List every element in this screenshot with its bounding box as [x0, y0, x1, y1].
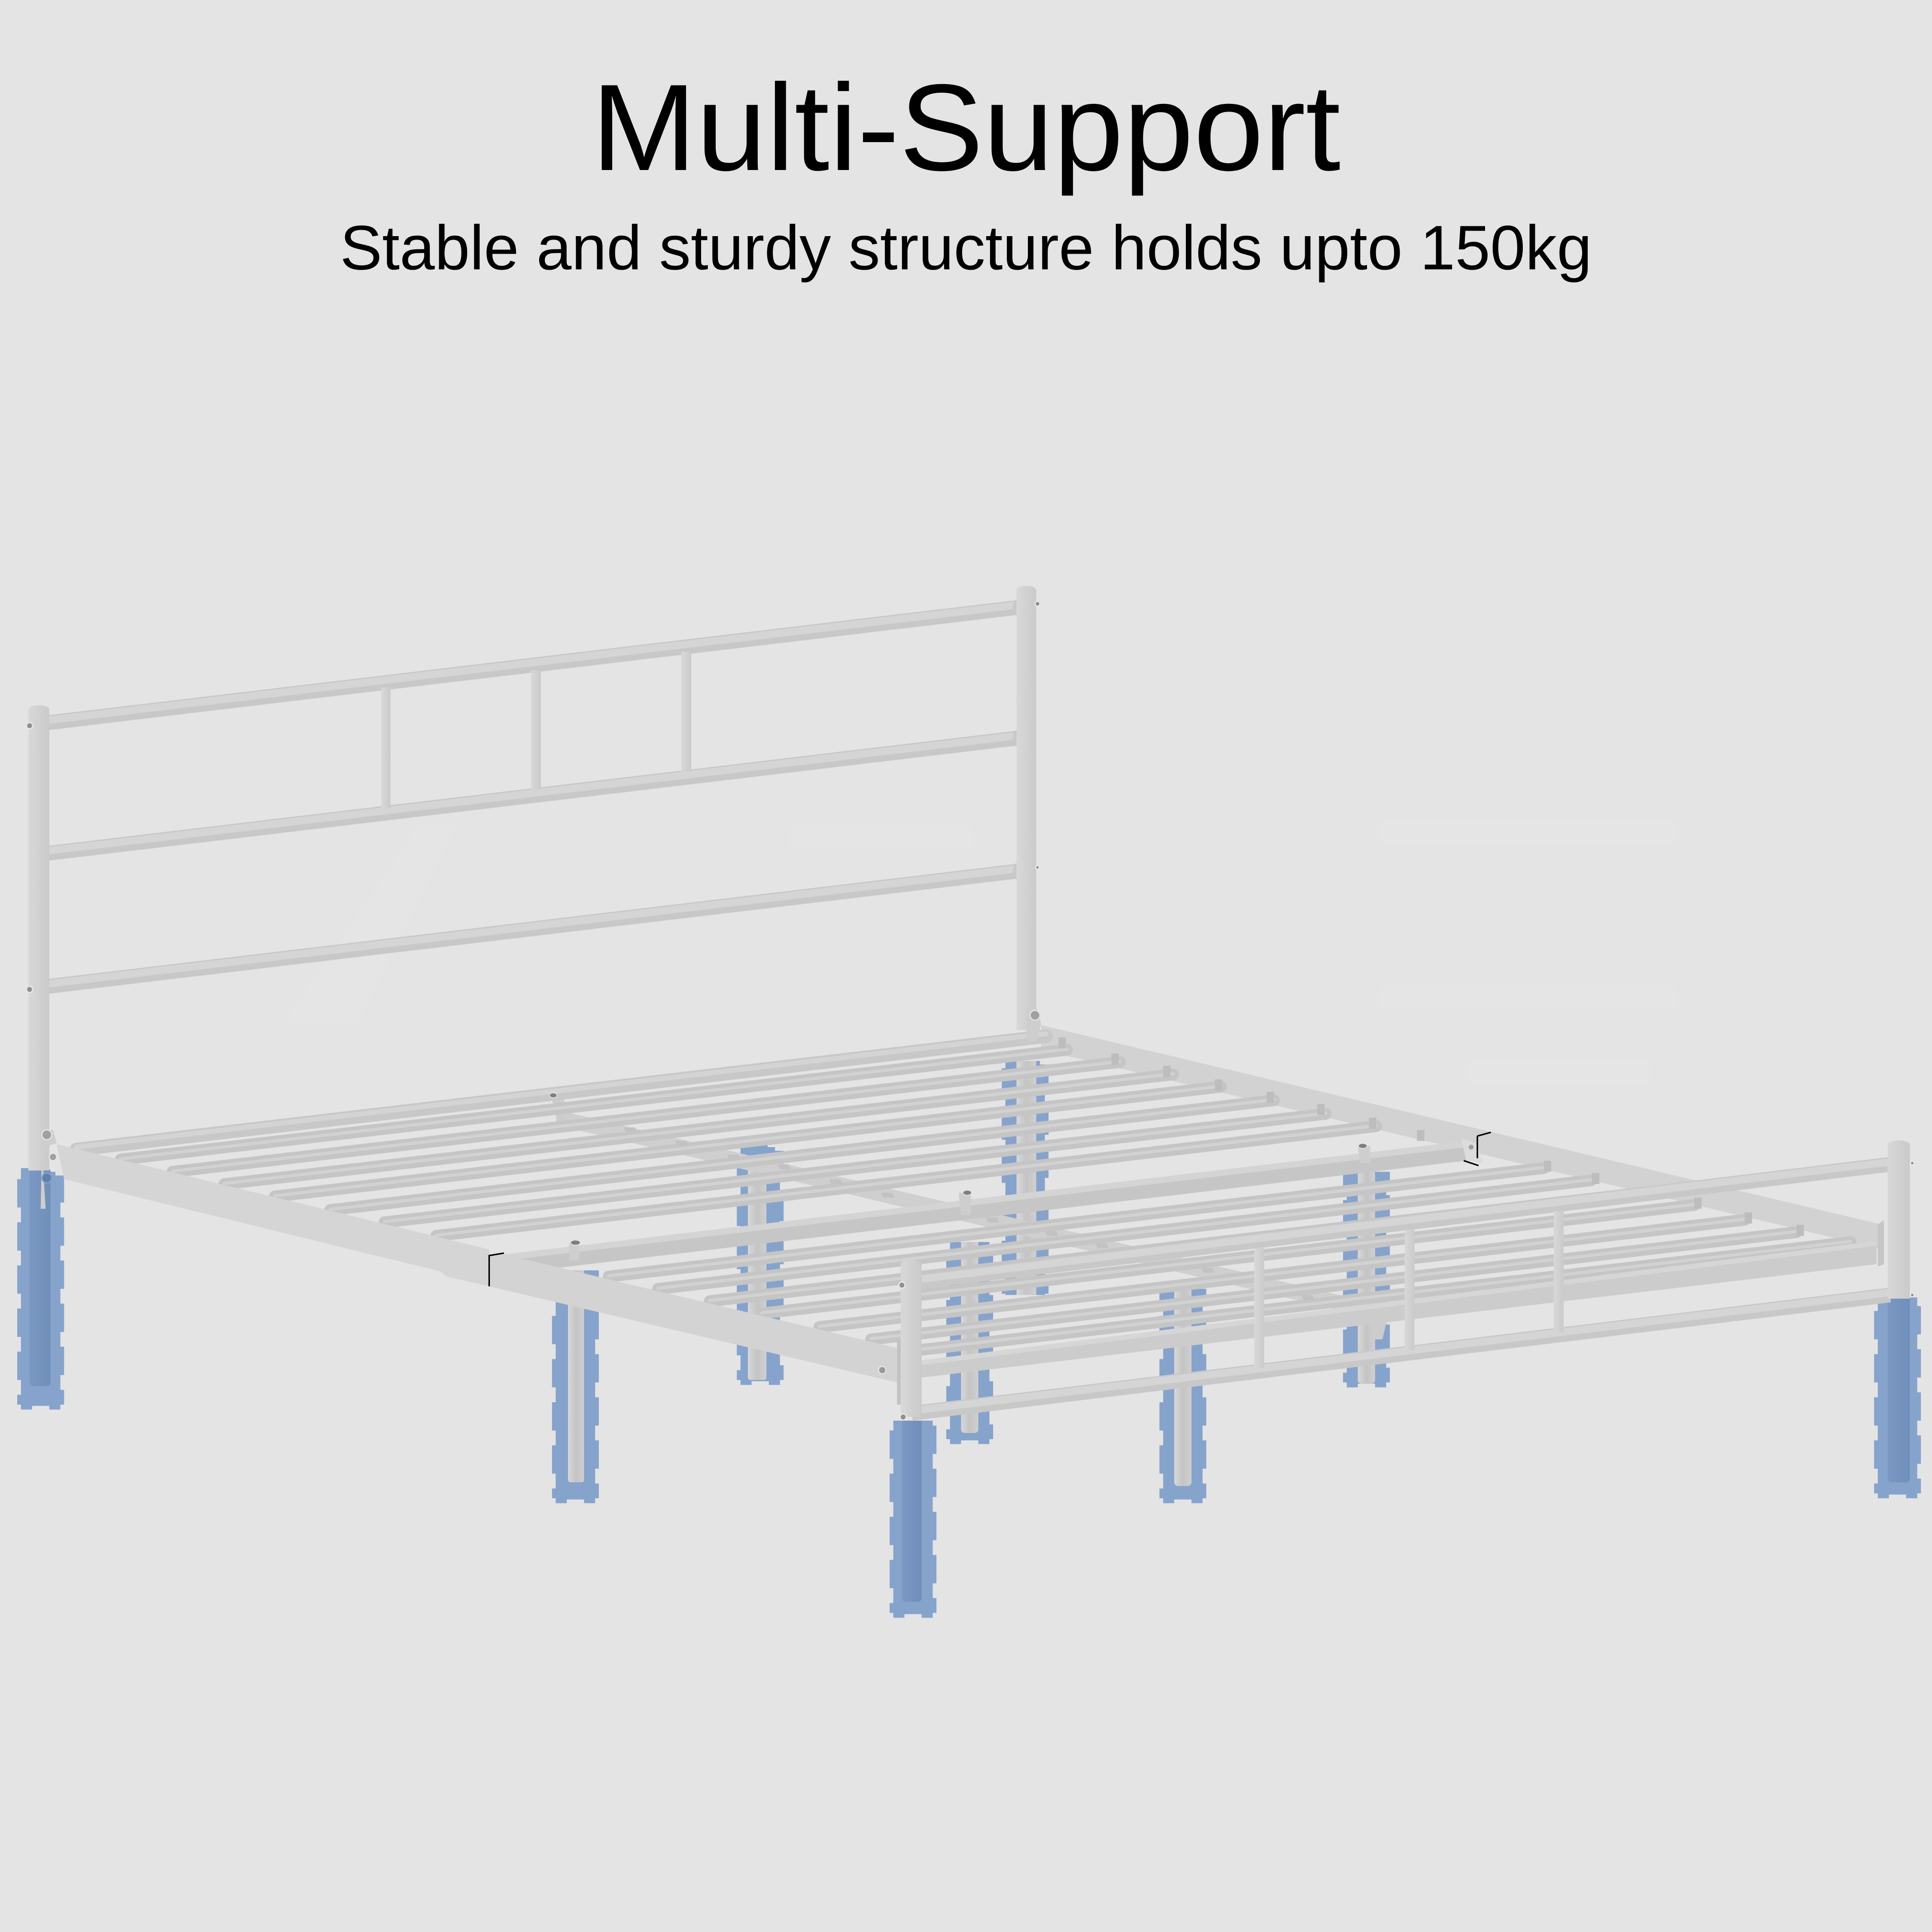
- left rail extension: [489, 1255, 897, 1382]
- leg highlight: head left: [17, 1168, 64, 1410]
- headboard vertical bars: [381, 652, 691, 808]
- leg highlight: side centre rear: [1343, 1172, 1390, 1388]
- leg highlight: centre foot: [1159, 1289, 1206, 1504]
- right head bracket: [1027, 1007, 1041, 1041]
- leg highlight: centre rear: [737, 1143, 784, 1385]
- footboard rails: [912, 1162, 1890, 1413]
- footboard screws: [899, 1161, 1914, 1420]
- leg highlight: foot left: [890, 1421, 937, 1618]
- centre cross beam: [505, 1093, 1466, 1274]
- footboard vertical bars: [1255, 1211, 1564, 1368]
- highlighted support legs: [17, 1035, 1921, 1618]
- footboard beam: [878, 1220, 1884, 1405]
- headboard: [27, 586, 1040, 1170]
- leg highlight: head right: [1002, 1061, 1048, 1295]
- headboard right post: [1017, 586, 1036, 1030]
- leg highlight: centre middle: [946, 1242, 993, 1444]
- head corner bracket: [41, 1130, 57, 1209]
- bed slats: [76, 1034, 1851, 1352]
- left rail section: [57, 1144, 489, 1286]
- slat end tabs on side rail: [1058, 1037, 1804, 1236]
- leg highlight: side centre front: [552, 1262, 599, 1503]
- left side rail: [41, 1007, 1041, 1382]
- leg highlight: foot right: [1874, 1297, 1921, 1498]
- footboard right post: [1888, 1140, 1910, 1299]
- title: Multi-Support: [592, 58, 1341, 197]
- faint watermark: [283, 819, 1676, 1084]
- headboard rail collars: [1013, 599, 1023, 880]
- headboard rails: [43, 605, 1018, 987]
- headboard screws: [27, 601, 1040, 993]
- headboard left post: [28, 705, 49, 1170]
- centre longitudinal support: [552, 1099, 1390, 1340]
- slat support tabs: [623, 1127, 1315, 1300]
- right side rail: [1041, 1025, 1883, 1249]
- subtitle: Stable and sturdy structure holds upto 150kg: [340, 213, 1592, 283]
- footboard: [899, 1140, 1914, 1420]
- footboard left post: [901, 1260, 922, 1417]
- side rail joint: [1461, 1132, 1491, 1166]
